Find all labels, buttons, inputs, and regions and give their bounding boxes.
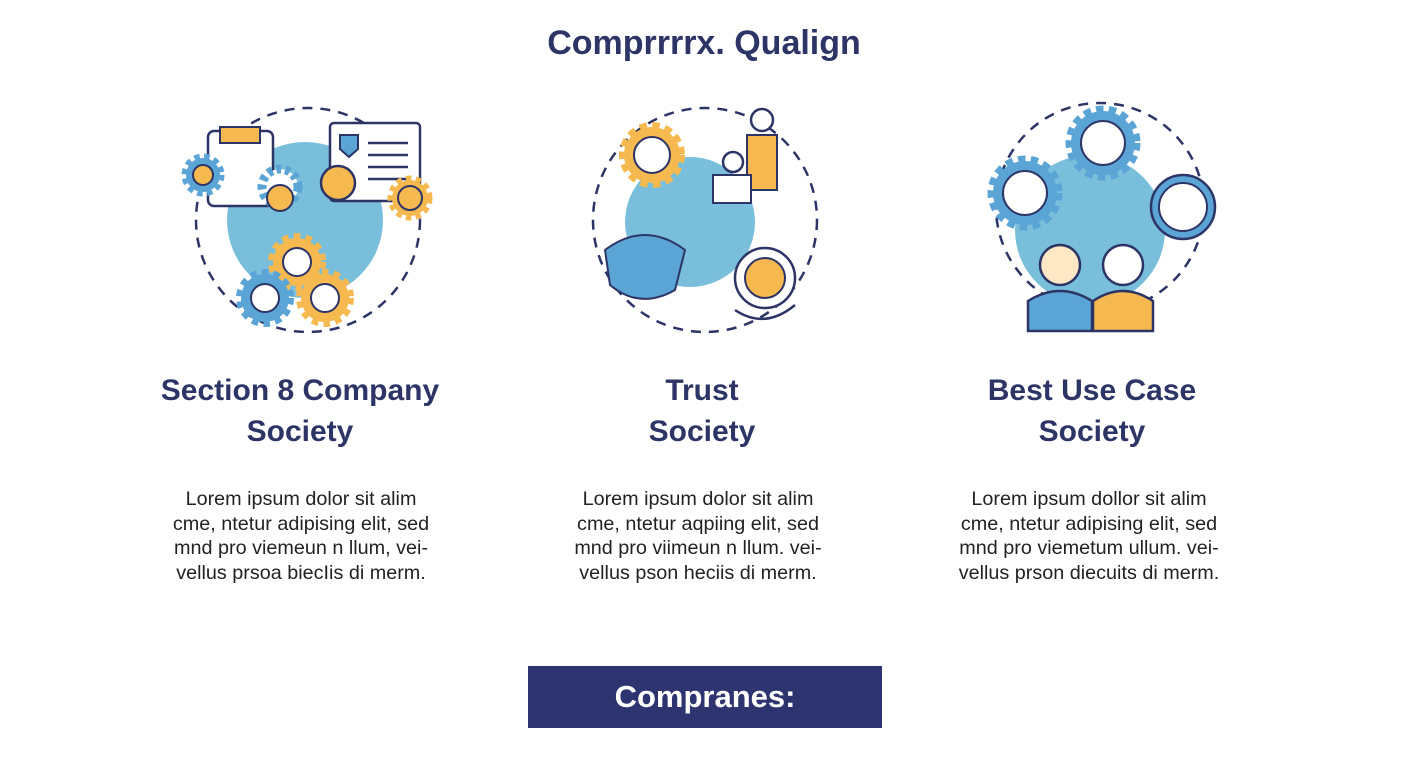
text: column 2 — [574, 488, 822, 584]
heading: column 1: Section 8 Company — [161, 374, 439, 407]
title: Comprrrrx. Qualign — [547, 24, 861, 62]
heading: column 1 — [161, 374, 439, 448]
heading: column 3: Society — [1039, 415, 1145, 448]
text: column 3: Lorem ipsum dollor sit alim — [971, 488, 1207, 510]
text: column 3: vellus prson diecuits di merm. — [959, 562, 1219, 584]
text: column 2: Lorem ipsum dolor sit alim — [583, 488, 813, 510]
text: column 3 — [958, 488, 1219, 584]
heading: column 2: Trust — [665, 374, 739, 407]
text: column 2: mnd pro viimeun n llum. vei- — [574, 537, 822, 559]
text: column 2: cme, ntetur aqpiing elit, sed — [577, 512, 819, 534]
text: column 1: vellus prsoa biecIis di merm. — [176, 562, 426, 584]
heading: column 2 — [649, 374, 756, 448]
icon: column 2 illustration — [592, 106, 818, 334]
text: column 1 — [173, 488, 429, 584]
heading: column 3 — [988, 374, 1196, 448]
text: column 3: cme, ntetur adipising elit, sed — [961, 512, 1217, 534]
heading: column 1: Society — [247, 415, 353, 448]
text: column 1: Lorem ipsum dolor sit alim — [186, 488, 416, 510]
button: footer: Compranes: — [615, 679, 795, 714]
text: column 3: mnd pro viemetum ullum. vei- — [959, 537, 1219, 559]
heading: column 3: Best Use Case — [988, 374, 1196, 407]
text: column 2: vellus pson heciis di merm. — [579, 562, 817, 584]
text: column 1: cme, ntetur adipising elit, sed — [173, 512, 429, 534]
heading: column 2: Society — [649, 415, 755, 448]
icon: column 1 illustration — [182, 106, 432, 334]
icon: column 3 illustration — [988, 102, 1216, 332]
button: footer — [528, 666, 882, 728]
text: column 1: mnd pro viemeun n llum, vei- — [174, 537, 428, 559]
